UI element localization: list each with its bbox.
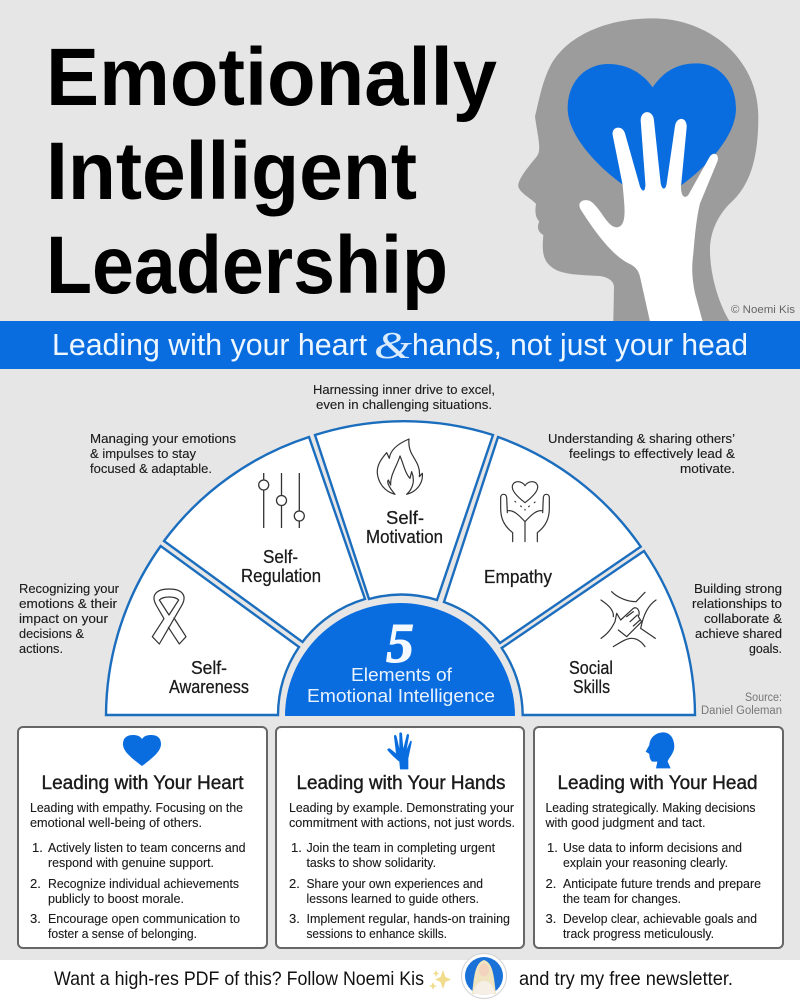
segment: self-motivation: Self- xyxy=(386,508,424,528)
heading: Leading with Your Hands xyxy=(296,772,506,794)
numbered list: Recognize individual achievements xyxy=(48,876,239,891)
description: self-awareness: impact on your xyxy=(19,611,109,626)
segment: self-regulation: Regulation xyxy=(241,566,321,586)
numbered list: explain your reasoning clearly. xyxy=(563,855,728,870)
description: empathy: motivate. xyxy=(680,461,735,476)
description: empathy: feelings to effectively lead & xyxy=(569,446,735,461)
illustration: head with heart and hand xyxy=(518,18,758,322)
description: self-regulation: Managing your emotions xyxy=(90,431,237,446)
description: self-regulation xyxy=(90,431,237,476)
description: social skills xyxy=(692,581,782,656)
segment: empathy xyxy=(444,437,641,643)
segment: self-motivation: Motivation xyxy=(366,527,443,547)
segment: self-regulation: Self- xyxy=(263,547,298,567)
description: social skills: relationships to xyxy=(692,596,782,611)
numbered list: track progress meticulously. xyxy=(563,926,714,941)
intro text xyxy=(30,800,243,830)
numbered list: Share your own experiences and xyxy=(306,876,483,891)
numbered list: 3. xyxy=(289,911,300,926)
numbered list: respond with genuine support. xyxy=(48,855,214,870)
icon: hand xyxy=(387,732,412,769)
numbered list: lessons learned to guide others. xyxy=(306,891,479,906)
copyright: © Noemi Kis xyxy=(731,304,796,316)
numbered list: 2. xyxy=(546,876,556,891)
numbered list: 3. xyxy=(30,911,41,926)
source note: Daniel Goleman xyxy=(701,705,782,717)
numbered list xyxy=(546,840,761,941)
segment: self-awareness: Self- xyxy=(191,658,227,678)
description: self-awareness: decisions & xyxy=(19,626,84,641)
description: social skills: achieve shared xyxy=(695,626,782,641)
banner: & xyxy=(374,325,413,367)
avatar xyxy=(462,954,506,998)
intro text: Leading with empathy. Focusing on the xyxy=(30,800,243,815)
segment: self-motivation xyxy=(315,421,493,600)
numbered list: foster a sense of belonging. xyxy=(48,926,197,941)
intro text: Leading by example. Demonstrating your xyxy=(289,800,515,815)
footer: and try my free newsletter. xyxy=(519,968,733,990)
title: Intelligent xyxy=(46,126,417,217)
description: self-regulation: & impulses to stay xyxy=(90,446,196,461)
segment: self-regulation xyxy=(164,437,365,642)
hub: 5 elements of emotional intelligence: 5 xyxy=(386,613,414,675)
hub: 5 elements of emotional intelligence: Emotional Intelligence xyxy=(307,685,495,706)
icon: head xyxy=(646,732,674,768)
intro text: emotional well-being of others. xyxy=(30,815,202,830)
title: Emotionally xyxy=(46,32,497,123)
numbered list: 2. xyxy=(30,876,41,891)
panel: leading with your hands xyxy=(276,727,524,948)
footer: Want a high-res PDF of this? Follow Noemi Kis xyxy=(54,968,424,990)
intro text: Leading strategically. Making decisions xyxy=(546,800,756,815)
source note: Source: xyxy=(745,692,782,704)
numbered list: 1. xyxy=(291,840,302,855)
segment: social skills: Skills xyxy=(573,677,610,697)
numbered list: publicly to boost morale. xyxy=(48,891,184,906)
panel: leading with your head xyxy=(534,727,783,948)
hub: 5 elements of emotional intelligence: Elements of xyxy=(351,664,453,685)
description: social skills: Building strong xyxy=(694,581,782,596)
numbered list: 1. xyxy=(32,840,43,855)
numbered list: the team for changes. xyxy=(563,891,681,906)
icon: flame xyxy=(377,439,422,494)
numbered list: 3. xyxy=(546,911,556,926)
description: self-awareness: emotions & their xyxy=(19,596,118,611)
description: self-awareness: Recognizing your xyxy=(19,581,120,596)
icon: heart xyxy=(123,735,161,766)
description: self-motivation: even in challenging situations. xyxy=(316,397,492,412)
description: self-motivation xyxy=(313,382,495,412)
description: empathy: Understanding & sharing others’ xyxy=(548,431,735,446)
intro text: with good judgment and tact. xyxy=(545,815,706,830)
title xyxy=(46,32,497,311)
numbered list: 2. xyxy=(289,876,300,891)
description: empathy xyxy=(548,431,735,476)
title: Leadership xyxy=(46,220,448,311)
description: social skills: goals. xyxy=(749,641,782,656)
footer xyxy=(0,954,800,1000)
numbered list: Anticipate future trends and prepare xyxy=(563,876,761,891)
icon: ribbon xyxy=(152,589,186,644)
hub: 5 elements of emotional intelligence xyxy=(285,603,515,716)
description: self-motivation: Harnessing inner drive to excel, xyxy=(313,382,495,397)
numbered list: tasks to show solidarity. xyxy=(306,855,436,870)
numbered list: sessions to enhance skills. xyxy=(306,926,447,941)
segment: self-awareness: Awareness xyxy=(169,677,249,697)
icon: sparkles xyxy=(429,970,451,990)
intro text: commitment with actions, not just words. xyxy=(289,815,515,830)
panel: leading with your heart xyxy=(18,727,267,948)
banner xyxy=(0,321,800,369)
segment: empathy: Empathy xyxy=(484,567,552,587)
numbered list: Encourage open communication to xyxy=(48,911,240,926)
banner: Leading with your heart xyxy=(52,327,367,362)
intro text xyxy=(289,800,515,830)
numbered list: Develop clear, achievable goals and xyxy=(563,911,757,926)
intro text xyxy=(545,800,756,830)
icon: hands holding heart xyxy=(501,482,549,542)
segment: social skills xyxy=(502,551,695,715)
numbered list xyxy=(30,840,246,941)
heading: Leading with Your Head xyxy=(558,772,758,794)
description: self-awareness: actions. xyxy=(19,641,63,656)
banner: hands, not just your head xyxy=(412,327,748,362)
source note xyxy=(701,692,782,717)
description: self-awareness xyxy=(19,581,120,656)
segment: social skills: Social xyxy=(569,658,613,678)
segment: self-awareness xyxy=(106,546,299,715)
numbered list: Implement regular, hands-on training xyxy=(306,911,510,926)
heading: Leading with Your Heart xyxy=(42,772,244,794)
numbered list: 1. xyxy=(547,840,558,855)
numbered list: Join the team in completing urgent xyxy=(306,840,495,855)
icon: stacked hands xyxy=(601,592,656,647)
description: self-regulation: focused & adaptable. xyxy=(90,461,212,476)
numbered list xyxy=(289,840,510,941)
description: social skills: collaborate & xyxy=(704,611,782,626)
numbered list: Use data to inform decisions and xyxy=(563,840,742,855)
numbered list: Actively listen to team concerns and xyxy=(48,840,246,855)
icon: sliders xyxy=(259,473,304,528)
